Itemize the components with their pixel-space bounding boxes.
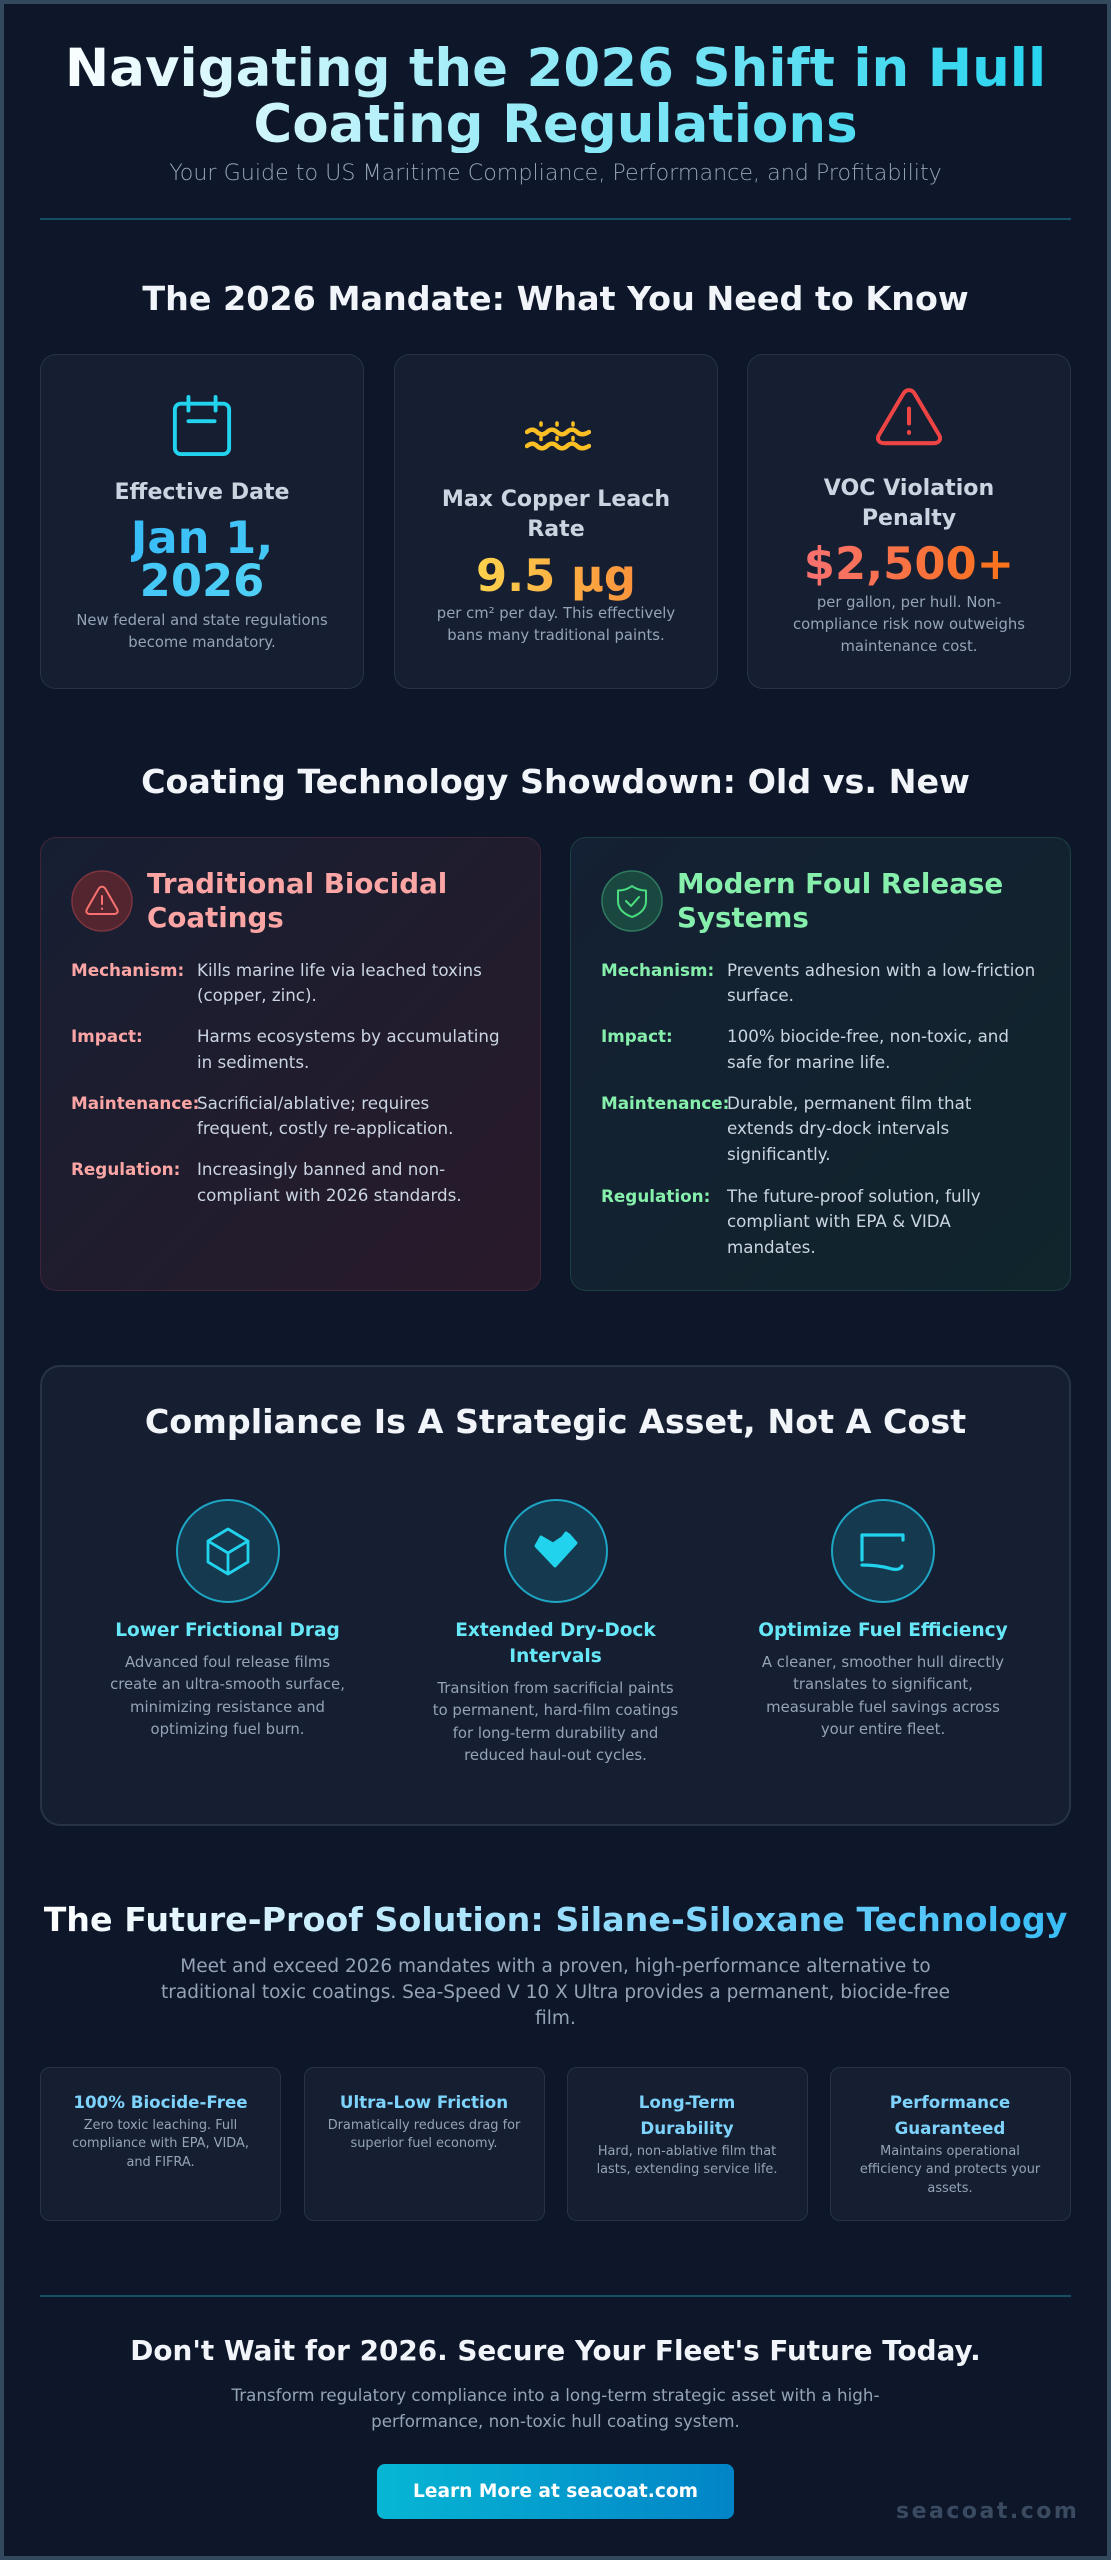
description: your entire fleet. (821, 1720, 945, 1738)
row: mechanism (601, 960, 1035, 1005)
panel: VOC violation penalty (747, 354, 1071, 689)
title (639, 2092, 735, 2138)
button: Learn More at seacoat.com (413, 2481, 698, 2502)
subtitle: Your Guide to US Maritime Compliance, Performance, and Profitability (169, 160, 942, 186)
heading (147, 867, 447, 934)
icon: warning in circle (71, 870, 133, 932)
button (377, 2464, 734, 2519)
description: assets. (927, 2181, 973, 2196)
description: compliance with EPA, VIDA, (72, 2136, 249, 2151)
heading: Compliance Is A Strategic Asset, Not A Cost (145, 1402, 966, 1441)
row: regulation: compliant with EPA & VIDA (727, 1211, 951, 1231)
heading (677, 867, 1003, 934)
row: impact: in sediments. (197, 1052, 309, 1072)
row: mechanism (71, 960, 482, 1005)
row: regulation: Regulation: (71, 1159, 180, 1179)
feature card: ultra-low friction (304, 2067, 544, 2221)
title: Intervals (509, 1646, 602, 1667)
description: Zero toxic leaching. Full (84, 2118, 237, 2132)
icon: heart (504, 1499, 608, 1603)
description (597, 2144, 777, 2177)
icon: calendar (172, 395, 232, 456)
title: Guaranteed (895, 2118, 1005, 2138)
row: mechanism: Mechanism: (71, 960, 184, 980)
feature card: performance guaranteed (830, 2067, 1070, 2221)
label: Max Copper Leach (442, 486, 670, 512)
row: mechanism: surface. (727, 985, 794, 1005)
description (328, 2118, 520, 2151)
description: Advanced foul release films (125, 1653, 330, 1671)
title: Extended Dry-Dock (455, 1620, 656, 1641)
title: Performance (890, 2092, 1010, 2112)
description: measurable fuel savings across (766, 1698, 1000, 1716)
description: Hard, non-ablative film that (598, 2144, 776, 2158)
row: maintenance: extends dry-dock intervals (727, 1118, 949, 1138)
panel: max copper leach rate (394, 354, 718, 689)
description (830, 2142, 1070, 2199)
row: impact: Impact: (601, 1026, 673, 1046)
heading: Traditional Biocidal (147, 867, 447, 900)
row: impact: safe for marine life. (727, 1052, 890, 1072)
row: regulation: Regulation: (601, 1186, 710, 1206)
description: create an ultra-smooth surface, (110, 1675, 345, 1693)
value: Jan 1, (131, 511, 273, 564)
title: Ultra-Low Friction (340, 2092, 508, 2112)
description: to permanent, hard-film coatings (433, 1701, 678, 1719)
title: Navigating the 2026 Shift in Hull (65, 38, 1046, 99)
description: Transition from sacrificial paints (437, 1679, 674, 1697)
title: Optimize Fuel Efficiency (758, 1620, 1008, 1641)
intro text: film. (535, 2008, 576, 2029)
row: impact: Harms ecosystems by accumulating (197, 1026, 500, 1046)
row: impact (601, 1026, 1009, 1072)
description: translates to significant, (793, 1675, 973, 1693)
description: minimizing resistance and (130, 1698, 325, 1716)
heading: Coatings (147, 901, 284, 934)
panel: modern foul release systems (570, 837, 1071, 1291)
title: Lower Frictional Drag (115, 1620, 340, 1641)
row: maintenance: Maintenance: (71, 1092, 199, 1112)
title: Coating Regulations (253, 94, 858, 155)
column: lower frictional drag (110, 1499, 345, 1738)
heading: coating showdown: Coating Technology Showdown: Old vs. New (141, 762, 970, 800)
row: impact (71, 1026, 500, 1072)
icon: shield in circle (601, 870, 663, 932)
description: and FIFRA. (126, 2155, 195, 2170)
heading: Modern Foul Release (677, 867, 1003, 900)
row: mechanism: Kills marine life via leached toxins (197, 960, 482, 980)
row: impact: 100% biocide-free, non-toxic, and (727, 1026, 1009, 1046)
description: Maintains operational (880, 2144, 1020, 2158)
row: maintenance: Sacrificial/ablative; requires (197, 1092, 429, 1112)
column: extended dry-dock intervals (433, 1499, 678, 1764)
description (793, 594, 1025, 655)
row: maintenance: significantly. (727, 1144, 831, 1164)
intro text: Meet and exceed 2026 mandates with a proven, high-performance alternative to (180, 1956, 931, 1977)
label (824, 475, 994, 531)
description: for long-term durability and (453, 1724, 658, 1742)
call to action text (0, 2382, 1111, 2434)
title (40, 41, 1071, 153)
label (442, 486, 670, 542)
value (131, 511, 273, 607)
title: Durability (640, 2118, 734, 2138)
description (437, 605, 675, 644)
panel: traditional biocidal coatings (40, 837, 541, 1291)
icon: cube (176, 1499, 280, 1603)
call to action heading: Don't Wait for 2026. Secure Your Fleet's Future Today. (130, 2334, 981, 2366)
watermark: seacoat.com (896, 2499, 1079, 2524)
row: regulation (601, 1186, 981, 1257)
column: optimize fuel efficiency (758, 1499, 1008, 1738)
description: become mandatory. (128, 634, 276, 651)
row: regulation (71, 1159, 462, 1205)
description: A cleaner, smoother hull directly (762, 1653, 1004, 1671)
row: mechanism: Prevents adhesion with a low-friction (727, 960, 1035, 980)
title: Long-Term (639, 2092, 735, 2112)
feature card: biocide-free (40, 2067, 281, 2221)
description: compliance risk now outweighs (793, 616, 1025, 633)
row: mechanism: Mechanism: (601, 960, 714, 980)
description: optimizing fuel burn. (151, 1720, 304, 1738)
title (890, 2092, 1010, 2138)
call to action text: Transform regulatory compliance into a long-term strategic asset with a high- (232, 2385, 879, 2405)
panel: effective date (40, 354, 364, 689)
description: reduced haul-out cycles. (464, 1746, 647, 1764)
feature card: long-term durability (566, 2067, 808, 2221)
row: maintenance: Durable, permanent film that (727, 1092, 971, 1112)
row: regulation: compliant with 2026 standards. (197, 1185, 462, 1205)
description (72, 2118, 249, 2170)
label: Effective Date (114, 479, 290, 505)
label: VOC Violation (824, 475, 994, 501)
row: regulation: The future-proof solution, fully (727, 1186, 981, 1206)
row: mechanism: (copper, zinc). (197, 985, 317, 1005)
icon: fuel bracket (831, 1499, 935, 1603)
description: maintenance cost. (840, 638, 978, 655)
row: maintenance: Maintenance: (601, 1092, 729, 1112)
heading: Systems (677, 901, 809, 934)
title (455, 1620, 656, 1667)
heading: the 2026 mandate: The 2026 Mandate: What You Need to Know (142, 279, 969, 318)
description: per gallon, per hull. Non- (817, 594, 1001, 610)
row: regulation: mandates. (727, 1237, 816, 1257)
row: maintenance (71, 1092, 453, 1138)
call to action text: performance, non-toxic hull coating system. (371, 2411, 740, 2431)
intro text (161, 1956, 950, 2029)
description (762, 1653, 1004, 1738)
row: maintenance (601, 1092, 972, 1164)
icon: warning triangle (876, 388, 942, 446)
label: Penalty (862, 505, 956, 531)
value: $2,500+ (804, 536, 1014, 590)
description: superior fuel economy. (351, 2136, 497, 2151)
description: lasts, extending service life. (597, 2162, 777, 2177)
icon: waves (525, 421, 591, 450)
value: 9.5 µg (476, 549, 636, 602)
description: Dramatically reduces drag for (328, 2118, 520, 2132)
heading: future-proof solution: The Future-Proof Solution: Silane-Siloxane Technology (44, 1900, 1067, 1938)
row: impact: Impact: (71, 1026, 143, 1046)
panel: strategic asset (40, 1365, 1071, 1826)
title: 100% Biocide-Free (73, 2092, 248, 2112)
description: bans many traditional paints. (447, 627, 665, 644)
description: per cm² per day. This effectively (437, 605, 675, 622)
description: efficiency and protects your (860, 2162, 1040, 2177)
description: New federal and state regulations (76, 612, 328, 629)
intro text: traditional toxic coatings. Sea-Speed V 10 X Ultra provides a permanent, biocide-free (161, 1982, 950, 2003)
label: Rate (527, 516, 585, 542)
row: regulation: Increasingly banned and non- (197, 1159, 445, 1179)
description (433, 1679, 678, 1764)
description (110, 1653, 345, 1738)
description (76, 612, 328, 651)
row: maintenance: frequent, costly re-application. (197, 1118, 453, 1138)
value: 2026 (140, 554, 264, 607)
